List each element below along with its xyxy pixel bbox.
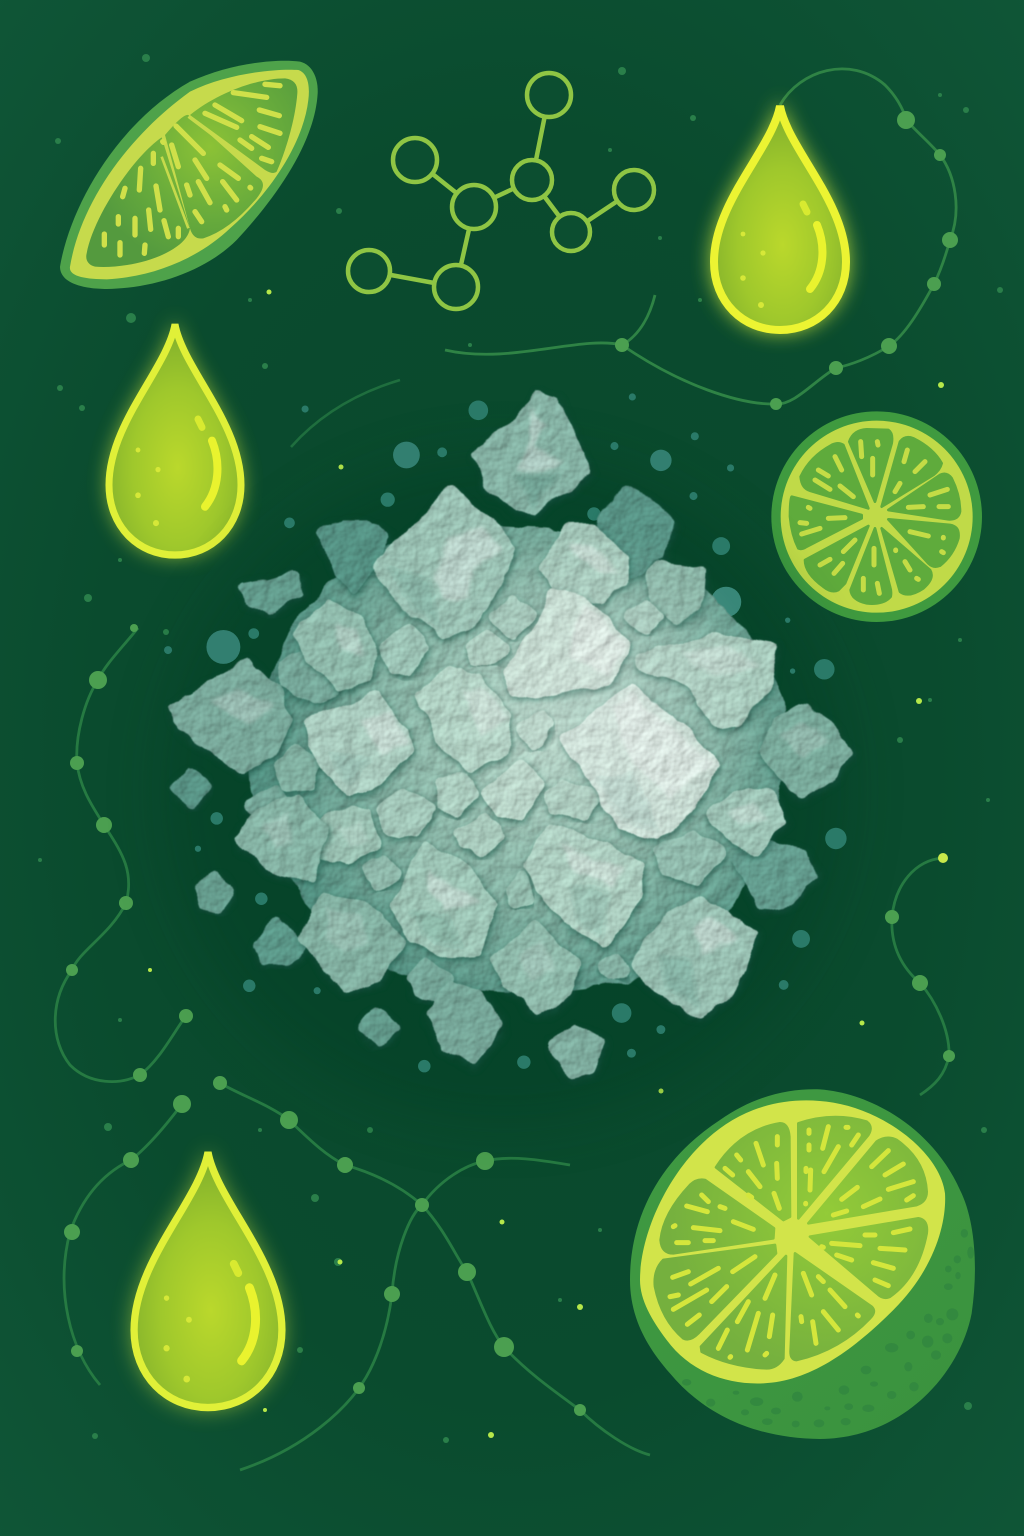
glowing sparks	[148, 290, 944, 1438]
vine network: bottom	[64, 1076, 650, 1470]
outer and back crystals	[174, 397, 849, 1073]
oil drop: top right	[711, 98, 849, 333]
crystal cluster shadow	[160, 455, 850, 1125]
oil drop: left	[106, 318, 244, 558]
crystal pile	[174, 397, 849, 1073]
vine faint strand	[291, 380, 400, 447]
scattered crystal grains	[164, 393, 847, 1072]
vine network: top right	[445, 69, 958, 410]
molecule diagram	[348, 73, 654, 309]
vine network: left	[55, 624, 193, 1082]
base mound	[248, 525, 786, 993]
lime slice round	[771, 411, 982, 622]
oil drop: bottom	[132, 1147, 284, 1410]
crystal highlight	[430, 530, 770, 870]
lime half	[630, 1089, 975, 1439]
large front crystals	[239, 493, 773, 1013]
vine network: right	[885, 853, 955, 1095]
lime wedge	[60, 61, 318, 289]
small inner crystals	[279, 602, 780, 904]
